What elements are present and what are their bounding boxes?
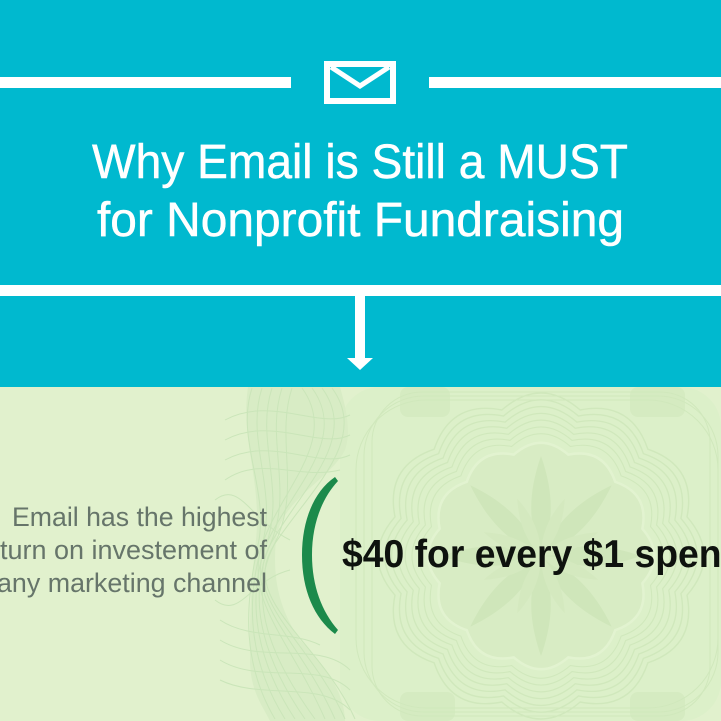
guilloche field behind rosette xyxy=(340,387,721,721)
arrow xyxy=(347,296,373,370)
guilloche wavy contours xyxy=(378,393,704,719)
guilloche rosette xyxy=(428,443,654,669)
title: Why Email is Still a MUST xyxy=(92,136,628,189)
title xyxy=(92,136,628,247)
lower divider xyxy=(0,285,721,296)
guilloche ribbon lines xyxy=(215,388,355,719)
guilloche outer frame lines xyxy=(356,392,718,716)
bracket xyxy=(302,477,338,634)
panel: green lower background xyxy=(0,387,721,721)
panel: teal header xyxy=(0,0,721,387)
icon: envelope xyxy=(327,64,393,101)
guilloche corner patches xyxy=(400,387,685,721)
text block: email ROI description: any marketing channel xyxy=(0,568,267,598)
text block: email ROI description: Email has the highest xyxy=(12,502,268,532)
top divider right xyxy=(429,77,721,88)
title: for Nonprofit Fundraising xyxy=(97,194,624,247)
guilloche ribbon band xyxy=(246,387,348,721)
top divider left xyxy=(0,77,291,88)
text block: email ROI description xyxy=(0,502,268,598)
